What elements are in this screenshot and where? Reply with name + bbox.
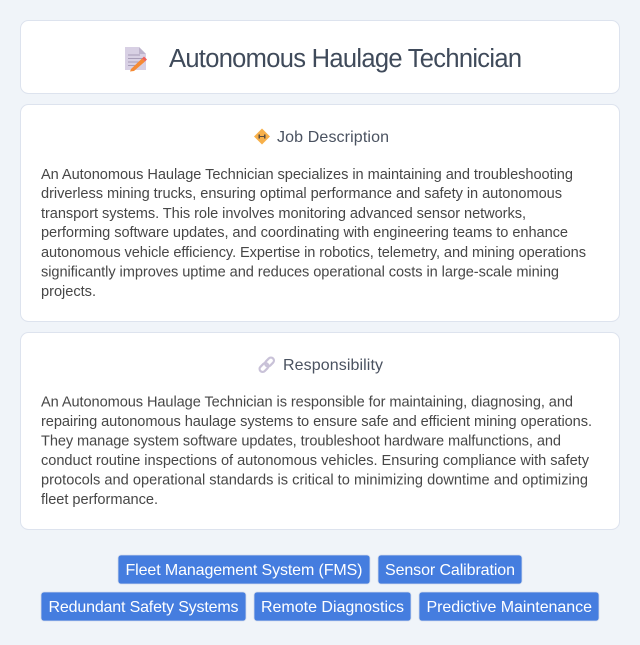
text block: job description bbox=[41, 167, 586, 300]
heading: responsibility: Responsibility bbox=[283, 357, 383, 374]
text block: responsibility bbox=[41, 394, 592, 508]
tag: sensor calibration: Sensor Calibration bbox=[385, 562, 515, 579]
text block: responsibility: repairing autonomous haulage systems to ensure safe and efficient mining operations. bbox=[41, 414, 592, 430]
panel: job description bbox=[20, 104, 620, 322]
tag: fleet management system: Fleet Management System (FMS) bbox=[126, 562, 362, 579]
text block: job description: transport systems. This role involves monitoring advanced sensor networks, bbox=[41, 206, 526, 222]
tag: redundant safety systems: Redundant Safety Systems bbox=[48, 599, 238, 616]
text block: responsibility: An Autonomous Haulage Technician is responsible for maintaining, diagnosing, and bbox=[41, 394, 573, 410]
tag: sensor calibration bbox=[378, 555, 522, 584]
text block: job description: significantly improves uptime and reduces operational costs in large-scale mining bbox=[41, 264, 559, 280]
tag: redundant safety systems bbox=[41, 592, 246, 621]
text block: job description: driverless mining trucks, ensuring optimal performance and safety in autonomous bbox=[41, 186, 562, 202]
title: Autonomous Haulage Technician bbox=[169, 45, 522, 73]
tag: remote diagnostics: Remote Diagnostics bbox=[261, 599, 404, 616]
tag: fleet management system bbox=[118, 555, 370, 584]
text block: responsibility: conduct routine inspections of autonomous vehicles. Ensuring compliance with safety bbox=[41, 453, 590, 469]
panel: responsibility bbox=[20, 332, 620, 530]
text block: responsibility: They manage system software updates, troubleshoot hardware malfunctions, and bbox=[41, 434, 561, 450]
text block: responsibility: fleet performance. bbox=[41, 492, 158, 508]
tags bbox=[41, 555, 599, 621]
text block: job description: performing software updates, and coordinating with engineering teams to enhance bbox=[41, 225, 568, 241]
text block: job description: An Autonomous Haulage Technician specializes in maintaining and troubleshooting bbox=[41, 167, 573, 183]
text block: job description: autonomous vehicle efficiency. Expertise in robotics, telemetry, and mining operations bbox=[41, 245, 586, 261]
text block: responsibility: protocols and operational standards is critical to minimizing downtime and optimizing bbox=[41, 472, 588, 488]
text block: job description: projects. bbox=[41, 284, 96, 300]
tag: predictive maintenance bbox=[419, 592, 599, 621]
icon: document with pencil bbox=[125, 47, 147, 72]
heading: job description: Job Description bbox=[277, 129, 389, 146]
tag: remote diagnostics bbox=[254, 592, 411, 621]
panel: title card bbox=[20, 20, 620, 94]
icon: chain link bbox=[258, 356, 275, 373]
tag: predictive maintenance: Predictive Maintenance bbox=[426, 599, 592, 616]
icon: orange diamond sign bbox=[254, 128, 270, 144]
